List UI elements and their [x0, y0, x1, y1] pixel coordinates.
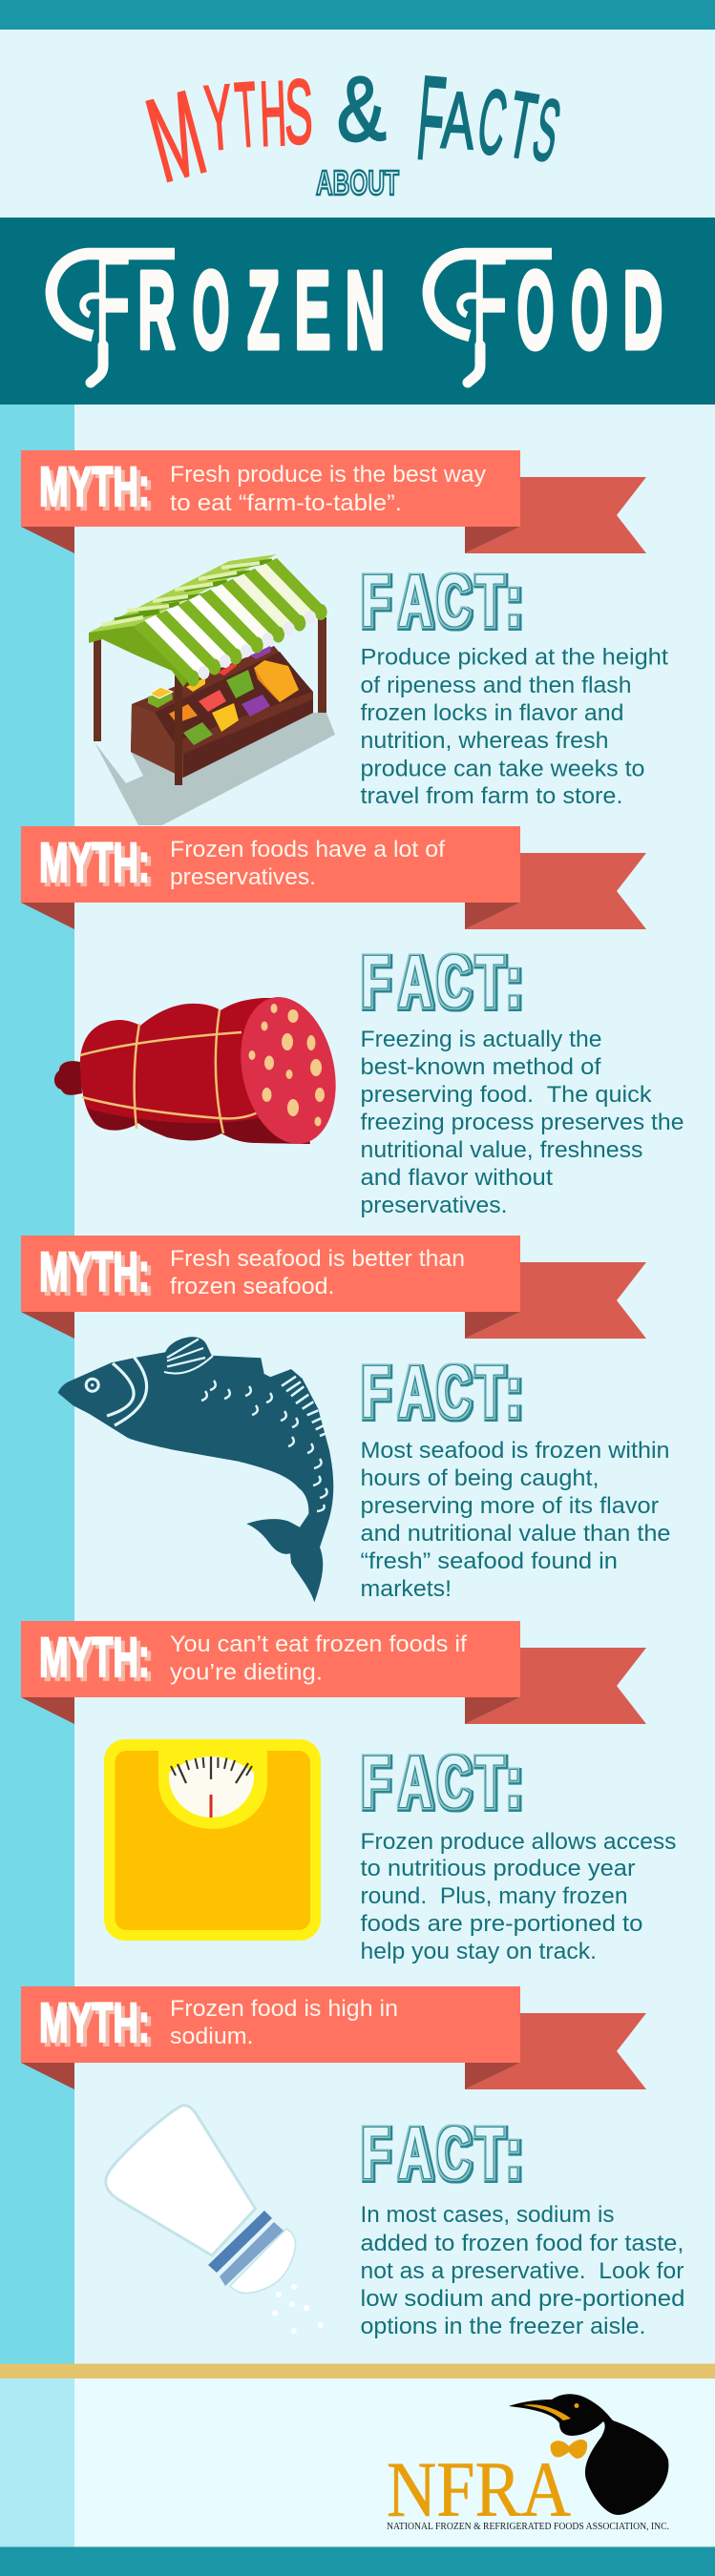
fact 4 — [361, 1740, 676, 1964]
fact body text — [361, 645, 668, 809]
myth ribbon 4 — [21, 1621, 646, 1724]
fact body text: In most cases, sodium is — [361, 2202, 615, 2228]
heading: Frozen Food: O — [571, 248, 608, 372]
myth statement: Frozen food is high in — [170, 1996, 398, 2022]
fact body text: Most seafood is frozen within — [361, 1438, 670, 1464]
heading: Frozen Food: F — [473, 222, 507, 383]
myth label: MYTH: — [39, 456, 150, 518]
fact body text: round. Plus, many frozen — [361, 1883, 628, 1909]
fact 2 — [361, 940, 683, 1218]
myth statement: Frozen foods have a lot of — [170, 837, 445, 862]
fact body text: Freezing is actually the — [361, 1027, 601, 1052]
fact body text: markets! — [361, 1576, 452, 1602]
fact body text: preservatives. — [361, 1193, 508, 1218]
fact 5 — [361, 2111, 685, 2339]
fact body text: produce can take weeks to — [361, 756, 645, 782]
myth statement: frozen seafood. — [170, 1274, 334, 1299]
logo: NFRA penguin: NFRA — [387, 2445, 571, 2533]
heading: Frozen Food — [52, 222, 662, 383]
heading: Frozen Food: D — [623, 249, 662, 372]
heading: Myths & Facts: S — [284, 60, 313, 163]
heading: Myths & Facts: C — [473, 71, 513, 175]
fact body text: nutritional value, freshness — [361, 1137, 643, 1163]
fact label: FACT: — [361, 1740, 521, 1823]
fact body text: not as a preservative. Look for — [361, 2258, 683, 2284]
myth statement: Fresh seafood is better than — [170, 1246, 465, 1272]
fact body text: preserving food. The quick — [361, 1082, 653, 1108]
fact body text: and flavor without — [361, 1165, 553, 1191]
myth ribbon 3 — [21, 1236, 646, 1339]
heading: Myths & Facts: F — [412, 51, 451, 186]
fact body text: “fresh” seafood found in — [361, 1548, 618, 1574]
fact body text: and nutritional value than the — [361, 1521, 670, 1547]
myth statement: you’re dieting. — [170, 1660, 323, 1685]
fact body text: low sodium and pre-portioned — [361, 2286, 685, 2312]
myth label: MYTH: — [39, 1627, 150, 1689]
illustration: salami — [54, 988, 348, 1153]
fact label: FACT: — [361, 940, 521, 1023]
myth label: MYTH: — [39, 1992, 150, 2054]
illustration: market stall — [89, 554, 335, 825]
myth statement — [170, 837, 445, 890]
heading: Frozen Food: Z — [247, 250, 280, 372]
myth label: MYTH: — [39, 1241, 150, 1303]
myth label: MYTH: — [39, 832, 150, 894]
fact body text: added to frozen food for taste, — [361, 2231, 683, 2256]
myth statement — [170, 1631, 467, 1685]
fact label: FACT: — [361, 2111, 521, 2194]
heading: Myths & Facts: A — [440, 74, 477, 166]
myth statement: sodium. — [170, 2024, 254, 2049]
fact body text: hours of being caught, — [361, 1465, 599, 1491]
fact body text: to nutritious produce year — [361, 1856, 636, 1881]
fact body text: travel from farm to store. — [361, 783, 622, 809]
fact body text: preserving more of its flavor — [361, 1493, 659, 1519]
fact body text — [361, 1027, 683, 1218]
illustration: bathroom scale — [104, 1739, 321, 1941]
heading: Frozen Food: O — [193, 248, 229, 372]
fact body text: help you stay on track. — [361, 1939, 597, 1964]
myth ribbon 1 — [21, 450, 646, 553]
illustration: fish — [58, 1337, 333, 1602]
fact 3 — [361, 1350, 670, 1602]
fact body text: foods are pre-portioned to — [361, 1911, 643, 1937]
subheading: about: ABOUT — [316, 163, 399, 202]
myth statement: to eat “farm-to-table”. — [170, 490, 402, 516]
myth statement — [170, 1996, 398, 2049]
fact body text: Produce picked at the height — [361, 645, 668, 670]
heading: Frozen Food: F — [95, 222, 130, 383]
heading: Frozen Food: E — [295, 249, 330, 372]
fact body text — [361, 1829, 676, 1964]
myth ribbon 5 — [21, 1986, 646, 2089]
myth ribbon 2 — [21, 826, 646, 929]
heading: Myths & Facts: T — [232, 63, 261, 167]
heading: Myths & Facts — [135, 51, 568, 207]
illustration: salt shaker — [106, 2106, 324, 2334]
footer panel — [0, 2364, 715, 2576]
myth statement: You can’t eat frozen foods if — [170, 1631, 467, 1657]
fact body text — [361, 2202, 685, 2339]
myth statement — [170, 1246, 465, 1299]
heading: Frozen Food: N — [346, 249, 385, 372]
heading: Frozen Food: R — [137, 249, 176, 373]
heading: Myths & Facts: M — [135, 66, 218, 207]
heading: Frozen Food: O — [517, 248, 554, 372]
fact body text: best-known method of — [361, 1054, 601, 1080]
fact body text: nutrition, whereas fresh — [361, 728, 609, 754]
fact body text — [361, 1438, 670, 1602]
title header panel — [0, 51, 715, 405]
fact body text: options in the freezer aisle. — [361, 2314, 645, 2339]
myth statement: Fresh produce is the best way — [170, 462, 486, 488]
logo: NFRA penguin: NATIONAL FROZEN & REFRIGERATED FOODS ASSOCIATION, INC. — [387, 2521, 669, 2532]
logo: NFRA penguin — [387, 2394, 669, 2533]
heading: Myths & Facts: H — [258, 63, 288, 165]
myth statement — [170, 462, 486, 516]
myth statement: preservatives. — [170, 864, 316, 890]
heading: Myths & Facts: S — [526, 79, 568, 180]
fact body text: of ripeness and then flash — [361, 673, 632, 698]
fact label: FACT: — [361, 1350, 521, 1433]
fact body text: frozen locks in flavor and — [361, 700, 624, 726]
fact 1 — [361, 559, 668, 809]
heading: Myths & Facts: & — [335, 57, 388, 161]
fact label: FACT: — [361, 559, 521, 642]
fact body text: Frozen produce allows access — [361, 1829, 676, 1855]
heading: Myths & Facts: T — [500, 72, 543, 179]
heading: Myths & Facts: Y — [201, 65, 236, 170]
fact body text: freezing process preserves the — [361, 1110, 683, 1135]
